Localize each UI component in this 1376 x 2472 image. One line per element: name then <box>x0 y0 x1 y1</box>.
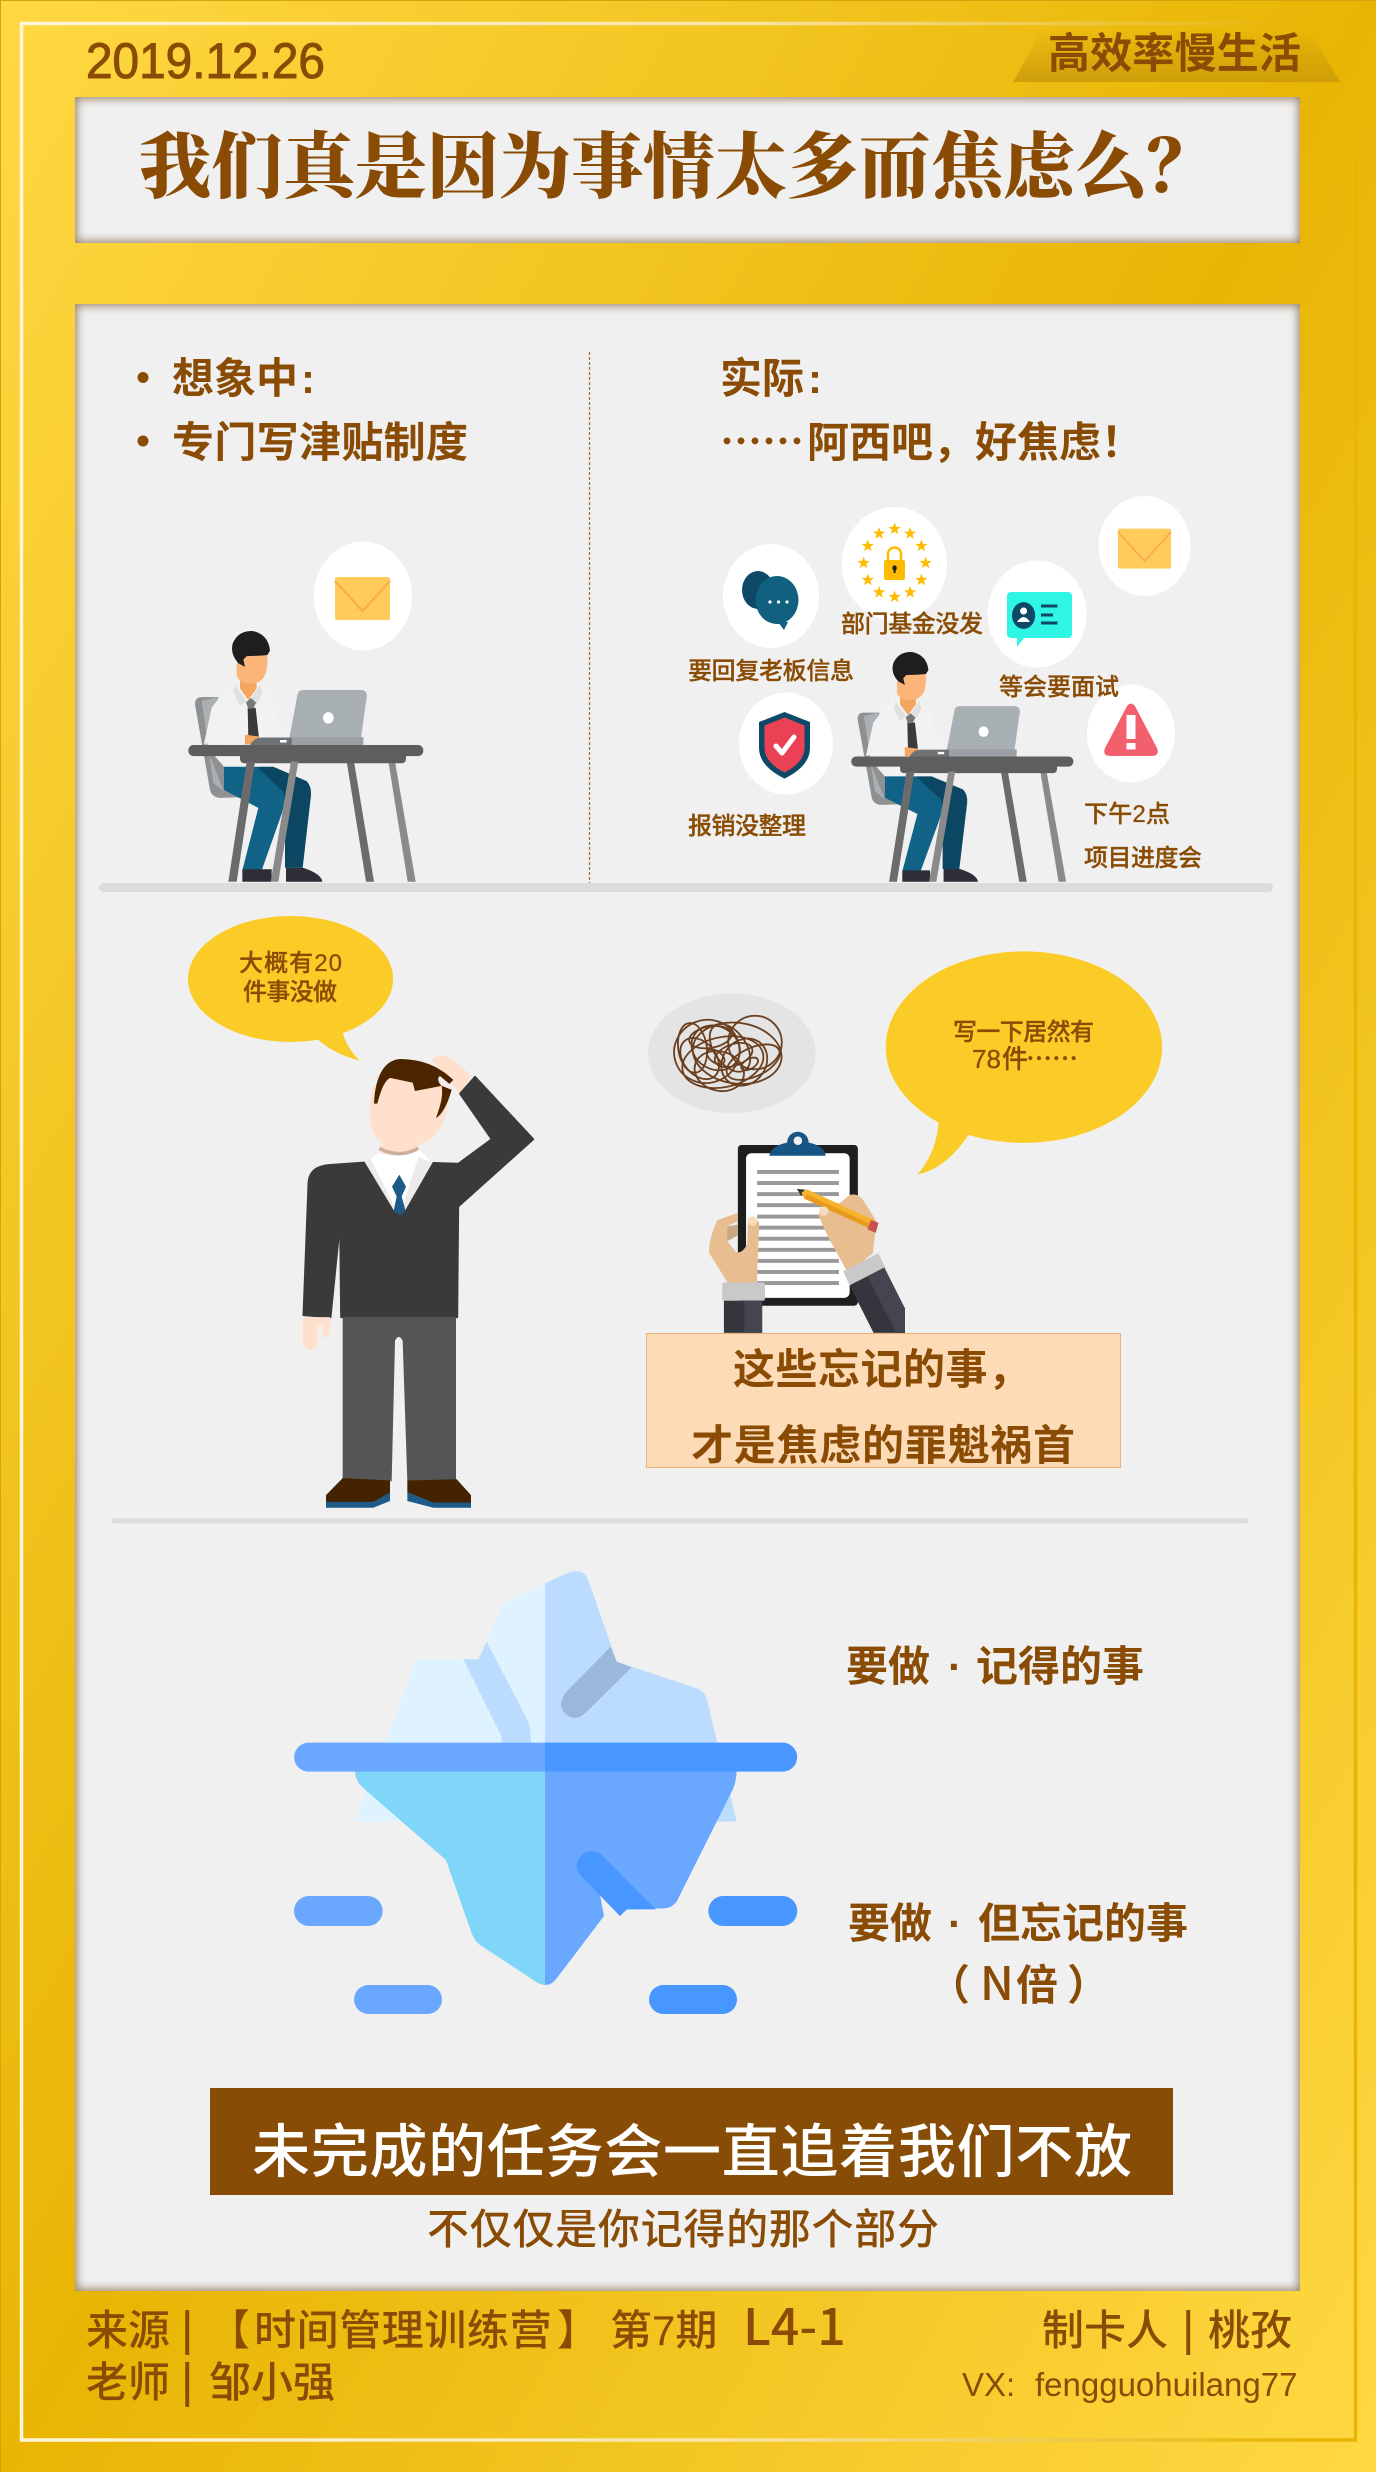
icon: envelope bubble (imagined) <box>314 542 412 650</box>
callout: forgotten things are the culprit: 这些忘记的事， <box>733 1346 1031 1393</box>
callout: actually 78 things: 78 <box>972 1044 1001 1074</box>
illustration: iceberg <box>294 1571 797 2014</box>
text: N times: N <box>980 1948 1014 2014</box>
callout: about 20 things: 大概有20 <box>239 950 342 977</box>
footer: card maker: 桃孜 <box>1208 2307 1292 2354</box>
title: 我们真是因为事情太多而焦虑么？ <box>139 109 1219 213</box>
callout: forgotten things are the culprit <box>646 1334 1120 1469</box>
footer: source: 】 <box>557 2297 599 2358</box>
vertical dashed divider <box>588 352 590 884</box>
panel: title background <box>75 97 1300 243</box>
text block: reality: 实际 <box>720 355 804 402</box>
callout: actually 78 things <box>886 951 1162 1175</box>
footer: card maker: 制卡人 <box>1042 2307 1168 2354</box>
text: N times: ） <box>1067 1952 1109 2013</box>
text: remembered tasks: · <box>948 1643 962 1690</box>
ground line <box>99 883 1273 892</box>
text block: imagined <box>138 355 468 466</box>
text: forgotten tasks: 要做 <box>848 1900 932 1947</box>
label: boss message: 要回复老板信息 <box>688 658 854 685</box>
icon: padlock with stars <box>842 507 947 621</box>
footer: source: L4-1 <box>743 2288 846 2360</box>
text: forgotten tasks: 但忘记的事 <box>978 1900 1188 1947</box>
text block: imagined: : <box>301 355 315 402</box>
banner: conclusion <box>210 2088 1173 2195</box>
footer: teacher: | <box>181 2355 193 2408</box>
tag: series name <box>1013 30 1340 82</box>
illustration: man scratching head <box>303 1055 533 1508</box>
callout: about 20 things: 件事没做 <box>243 979 337 1006</box>
label: expenses: 报销没整理 <box>688 813 806 840</box>
footer: source: 第7期 <box>610 2307 717 2354</box>
callout: actually 78 things: …… <box>1026 1039 1078 1076</box>
footer: source: 【 <box>208 2297 250 2358</box>
label: meeting time: 下午2点 <box>1084 801 1170 828</box>
label: progress meeting: 项目进度会 <box>1084 845 1202 872</box>
illustration: clipboard and hands <box>709 1132 905 1333</box>
icon: envelope bubble (actual) <box>1099 496 1191 596</box>
text: remembered tasks: 要做 <box>846 1643 930 1690</box>
illustration: tangled thoughts <box>648 993 816 1113</box>
callout: forgotten things are the culprit: 才是焦虑的罪魁祸首 <box>691 1422 1075 1469</box>
callout: actually 78 things: 写一下居然有 <box>953 1019 1094 1046</box>
text block: reality: 阿西吧，好焦虑！ <box>807 419 1143 466</box>
tag: series name: 高效率慢生活 <box>1048 30 1301 77</box>
text block: reality: : <box>808 355 822 402</box>
text block: imagined: 想象中 <box>172 355 298 402</box>
banner: conclusion: 未完成的任务会一直追着我们不放 <box>252 2120 1132 2185</box>
divider <box>112 1518 1248 1524</box>
text: remembered tasks: 记得的事 <box>976 1643 1144 1690</box>
icon: shield <box>739 692 833 794</box>
text: N times: 倍 <box>1016 1962 1058 2009</box>
footer: teacher: 邹小强 <box>209 2359 335 2406</box>
illustration: worker at desk (actual) <box>851 652 1073 882</box>
text: forgotten tasks: · <box>948 1900 962 1947</box>
text block: reality <box>720 355 1143 470</box>
text block: imagined: 专门写津贴制度 <box>172 419 468 466</box>
icon: warning triangle <box>1087 684 1175 782</box>
text block: reality: …… <box>720 409 804 470</box>
footer: source: 来源 <box>86 2307 170 2354</box>
callout: about 20 things <box>188 916 393 1060</box>
text: N times: （ <box>928 1952 970 2013</box>
label: fund: 部门基金没发 <box>841 611 983 638</box>
footer: source: | <box>181 2303 193 2356</box>
footer: contact: VX: <box>962 2366 1015 2403</box>
footer: source: 时间管理训练营 <box>254 2307 552 2354</box>
text: subtitle: 不仅仅是你记得的那个部分 <box>427 2206 939 2253</box>
footer: card maker: | <box>1182 2303 1194 2356</box>
footer: teacher: 老师 <box>86 2359 170 2406</box>
callout: actually 78 things: 件 <box>1002 1044 1028 1074</box>
label: interview: 等会要面试 <box>999 674 1119 701</box>
footer: contact: fengguohuilang77 <box>1035 2366 1297 2403</box>
icon: chat bubble <box>723 544 819 648</box>
illustration: worker at desk (imagined) <box>188 631 423 882</box>
date: 2019.12.26 <box>86 33 325 89</box>
icon: ID card message <box>988 560 1086 668</box>
panel: main content background <box>75 304 1300 2291</box>
